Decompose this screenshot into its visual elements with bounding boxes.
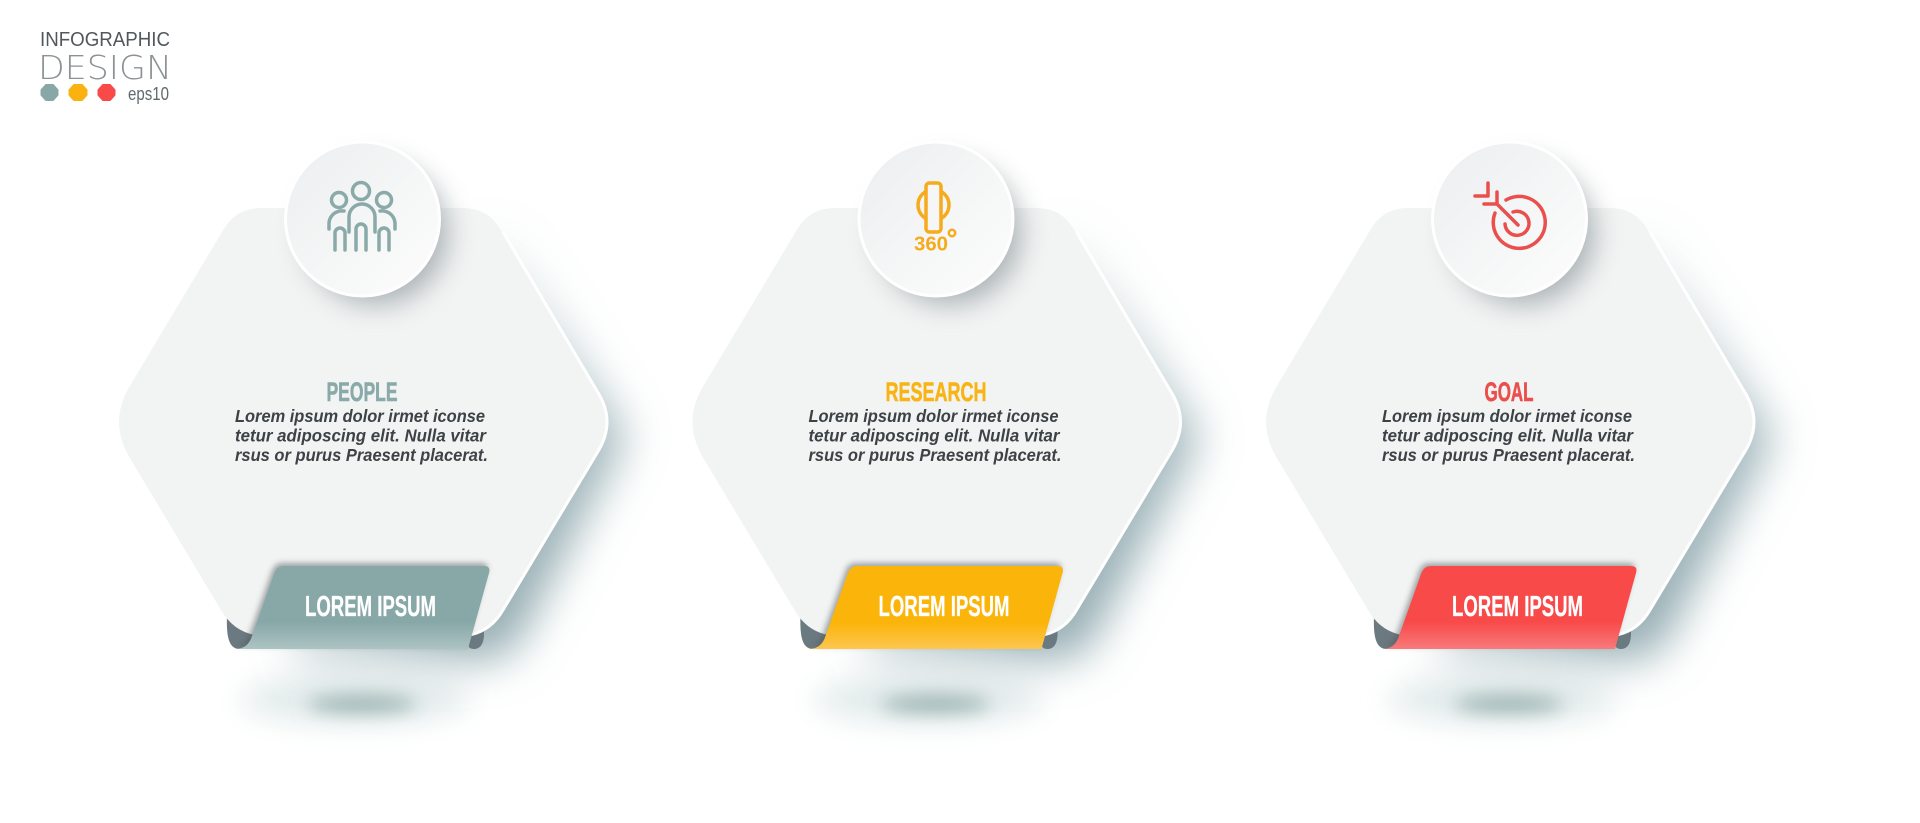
heading: goal: GOAL <box>1484 377 1534 407</box>
icon: 360 degree: 360 <box>914 234 948 256</box>
logo swatch: teal hexagon <box>42 85 58 100</box>
heading: research: RESEARCH <box>886 377 986 407</box>
body text <box>808 406 1062 465</box>
icon: target <box>1475 183 1545 248</box>
heading: people: PEOPLE <box>326 377 398 407</box>
icon disc <box>859 142 1013 296</box>
body text: tetur adiposcing elit. Nulla vitar <box>1382 426 1634 446</box>
hexagon drop shadow <box>1437 235 1772 660</box>
ribbon curls <box>227 615 484 649</box>
logo swatch: red hexagon <box>98 85 114 100</box>
body text: rsus or purus Praesent placerat. <box>1382 445 1635 465</box>
body text: Lorem ipsum dolor irmet iconse <box>235 406 485 426</box>
body text: tetur adiposcing elit. Nulla vitar <box>235 426 487 446</box>
ribbon shadow <box>1380 563 1634 646</box>
circle shadow <box>1451 161 1595 305</box>
body text: tetur adiposcing elit. Nulla vitar <box>808 426 1061 446</box>
ribbon label: LOREM IPSUM <box>878 591 1010 623</box>
logo text: eps10: eps10 <box>128 84 169 104</box>
hexagon card <box>1266 208 1754 636</box>
ground shadow <box>814 676 1044 724</box>
ribbon curls <box>1374 615 1631 649</box>
logo swatch: yellow hexagon <box>70 85 86 100</box>
icon: 360 degree <box>914 183 955 256</box>
hexagon drop shadow <box>864 235 1198 660</box>
logo: infographic design eps10 <box>38 28 172 104</box>
ribbon <box>1382 566 1636 649</box>
ribbon <box>235 566 489 649</box>
ribbon shadow <box>233 563 487 646</box>
ribbon curls <box>800 615 1058 649</box>
hexagon drop shadow <box>290 235 625 660</box>
panel: research <box>692 142 1198 724</box>
body text: rsus or purus Praesent placerat. <box>235 445 488 465</box>
panel: goal <box>1266 142 1772 724</box>
hexagon card <box>692 208 1180 636</box>
ribbon label: LOREM IPSUM <box>1452 591 1583 623</box>
icon: people <box>329 182 395 250</box>
icon disc <box>1432 142 1586 296</box>
logo heading: INFOGRAPHIC: INFOGRAPHIC <box>40 28 170 51</box>
ribbon label: LOREM IPSUM <box>305 591 436 623</box>
hexagon card <box>119 208 607 636</box>
body text <box>1382 406 1635 465</box>
panel: people <box>119 142 625 724</box>
circle shadow <box>304 161 448 305</box>
body text: rsus or purus Praesent placerat. <box>808 445 1062 465</box>
body text: Lorem ipsum dolor irmet iconse <box>808 406 1059 426</box>
circle shadow <box>878 161 1022 305</box>
body text <box>235 406 488 465</box>
ribbon <box>808 566 1063 649</box>
logo heading: DESIGN: DESIGN <box>38 48 172 87</box>
ground shadow <box>1387 676 1617 724</box>
ribbon shadow <box>806 563 1061 646</box>
body text: Lorem ipsum dolor irmet iconse <box>1382 406 1632 426</box>
icon disc <box>286 142 440 296</box>
ground shadow <box>240 676 470 724</box>
